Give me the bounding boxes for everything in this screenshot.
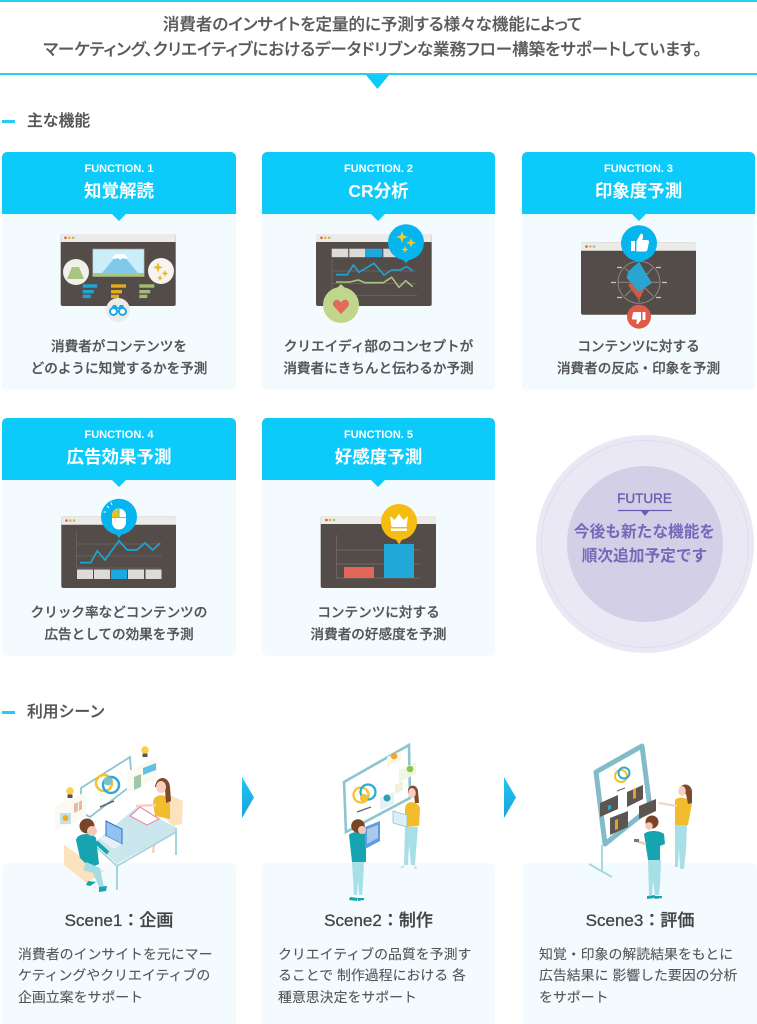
scene 2 text: クリエイティブの品質を予測す [278, 946, 471, 962]
description: クリック率などコンテンツの [31, 604, 207, 620]
header: function 1 [2, 152, 236, 214]
pointer [632, 214, 646, 221]
description [557, 338, 720, 376]
scene 2 title: Scene2：制作 [324, 911, 433, 930]
label: future: FUTURE [617, 490, 672, 506]
header: function 5: FUNCTION. 5 [344, 429, 413, 441]
thin ring [540, 440, 748, 648]
bottom rule [0, 73, 757, 75]
description: コンテンツに対する [317, 604, 440, 620]
header: function 3: FUNCTION. 3 [604, 163, 673, 175]
illustration: evaluation [588, 744, 692, 899]
scene 1 text: ケティングやクリエイティブの [18, 967, 210, 983]
scene 2 text [278, 946, 471, 1004]
icon: favorability window [320, 504, 436, 588]
header: function 3: 印象度予測 [595, 181, 682, 201]
scene 1 text: 企画立案をサポート [18, 988, 143, 1004]
arrow: lead pointer [366, 75, 389, 89]
description: どのように知覚するかを予測 [31, 360, 207, 376]
future message: 順次追加予定です [582, 548, 707, 565]
heading: usage scenes: 利用シーン [27, 704, 105, 721]
scene 2 text: 種意思決定をサポート [278, 988, 417, 1004]
scene 3 text: 知覚・印象の解読結果をもとに [539, 946, 733, 962]
description: クリエイディ部のコンセプトが [284, 338, 473, 354]
header: function 5: 好感度予測 [335, 447, 422, 467]
scene 1 text [18, 946, 212, 1004]
header: function 2: FUNCTION. 2 [344, 163, 413, 175]
panel: scene 2 [262, 863, 495, 1024]
header: function 4: FUNCTION. 4 [84, 429, 154, 441]
scene 3 text: をサポート [539, 988, 608, 1004]
description [31, 604, 207, 642]
header: function 5 [262, 418, 495, 480]
panel: future circle [536, 435, 754, 653]
pointer [112, 480, 126, 487]
illustration: production [342, 742, 420, 901]
panel: function 1 [2, 152, 236, 390]
panel: function 3 [522, 152, 755, 390]
panel: function 4 [2, 418, 236, 656]
icon: perception window [60, 234, 176, 322]
panel: function 2 [262, 152, 495, 390]
underline with marker [618, 510, 672, 516]
header: function 1: FUNCTION. 1 [84, 163, 154, 175]
header: function 2 [262, 152, 495, 214]
illustration: planning meeting [55, 746, 183, 892]
description [283, 338, 474, 376]
scene 1 text: 消費者のインサイトを元にマー [18, 946, 212, 962]
future message: 今後も新たな機能を [574, 524, 715, 541]
scene 3 text: 広告結果に 影響した要因の分析 [539, 967, 737, 983]
lead text: 消費者のインサイトを定量的に予測する様々な機能によって [163, 16, 582, 34]
arrow: scene 2 to 3 [504, 777, 516, 818]
pointer [371, 214, 385, 221]
future message [574, 523, 715, 565]
pointer [371, 480, 385, 487]
arrow: scene 1 to 2 [242, 777, 254, 818]
scene 3 text [539, 946, 737, 1004]
pointer [112, 214, 126, 221]
description: 消費者がコンテンツを [51, 338, 187, 354]
icon: CR chart window [316, 224, 432, 323]
scene 1 title: Scene1：企画 [65, 911, 173, 930]
heading: main functions: 主な機能 [27, 113, 90, 130]
description: 消費者にきちんと伝わるか予測 [283, 360, 474, 376]
header: function 4: 広告効果予測 [66, 447, 172, 467]
description: 消費者の反応・印象を予測 [557, 360, 720, 376]
header: function 4 [2, 418, 236, 480]
panel: scene 1 [2, 863, 236, 1024]
top rule [0, 0, 757, 2]
lead text [43, 16, 702, 58]
panel: function 5 [262, 418, 495, 656]
description [310, 604, 446, 642]
description [31, 338, 207, 376]
header: function 2: CR分析 [348, 181, 409, 201]
description: 広告としての効果を予測 [44, 626, 194, 642]
header: function 1: 知覚解読 [84, 181, 154, 201]
header: function 3 [522, 152, 755, 214]
lead text: マーケティング、クリエイティブにおけるデータドリブンな業務フロー構築をサポートしています。 [43, 40, 702, 58]
scene 2 text: ることで 制作過程における 各 [278, 967, 466, 983]
panel: scene 3 [523, 863, 757, 1024]
description: コンテンツに対する [577, 338, 700, 354]
inner circle [566, 466, 722, 622]
scene 3 title: Scene3：評価 [586, 911, 694, 930]
icon: ad effect window [61, 498, 176, 588]
description: 消費者の好感度を予測 [311, 626, 446, 642]
icon: impression radar window [581, 225, 696, 329]
